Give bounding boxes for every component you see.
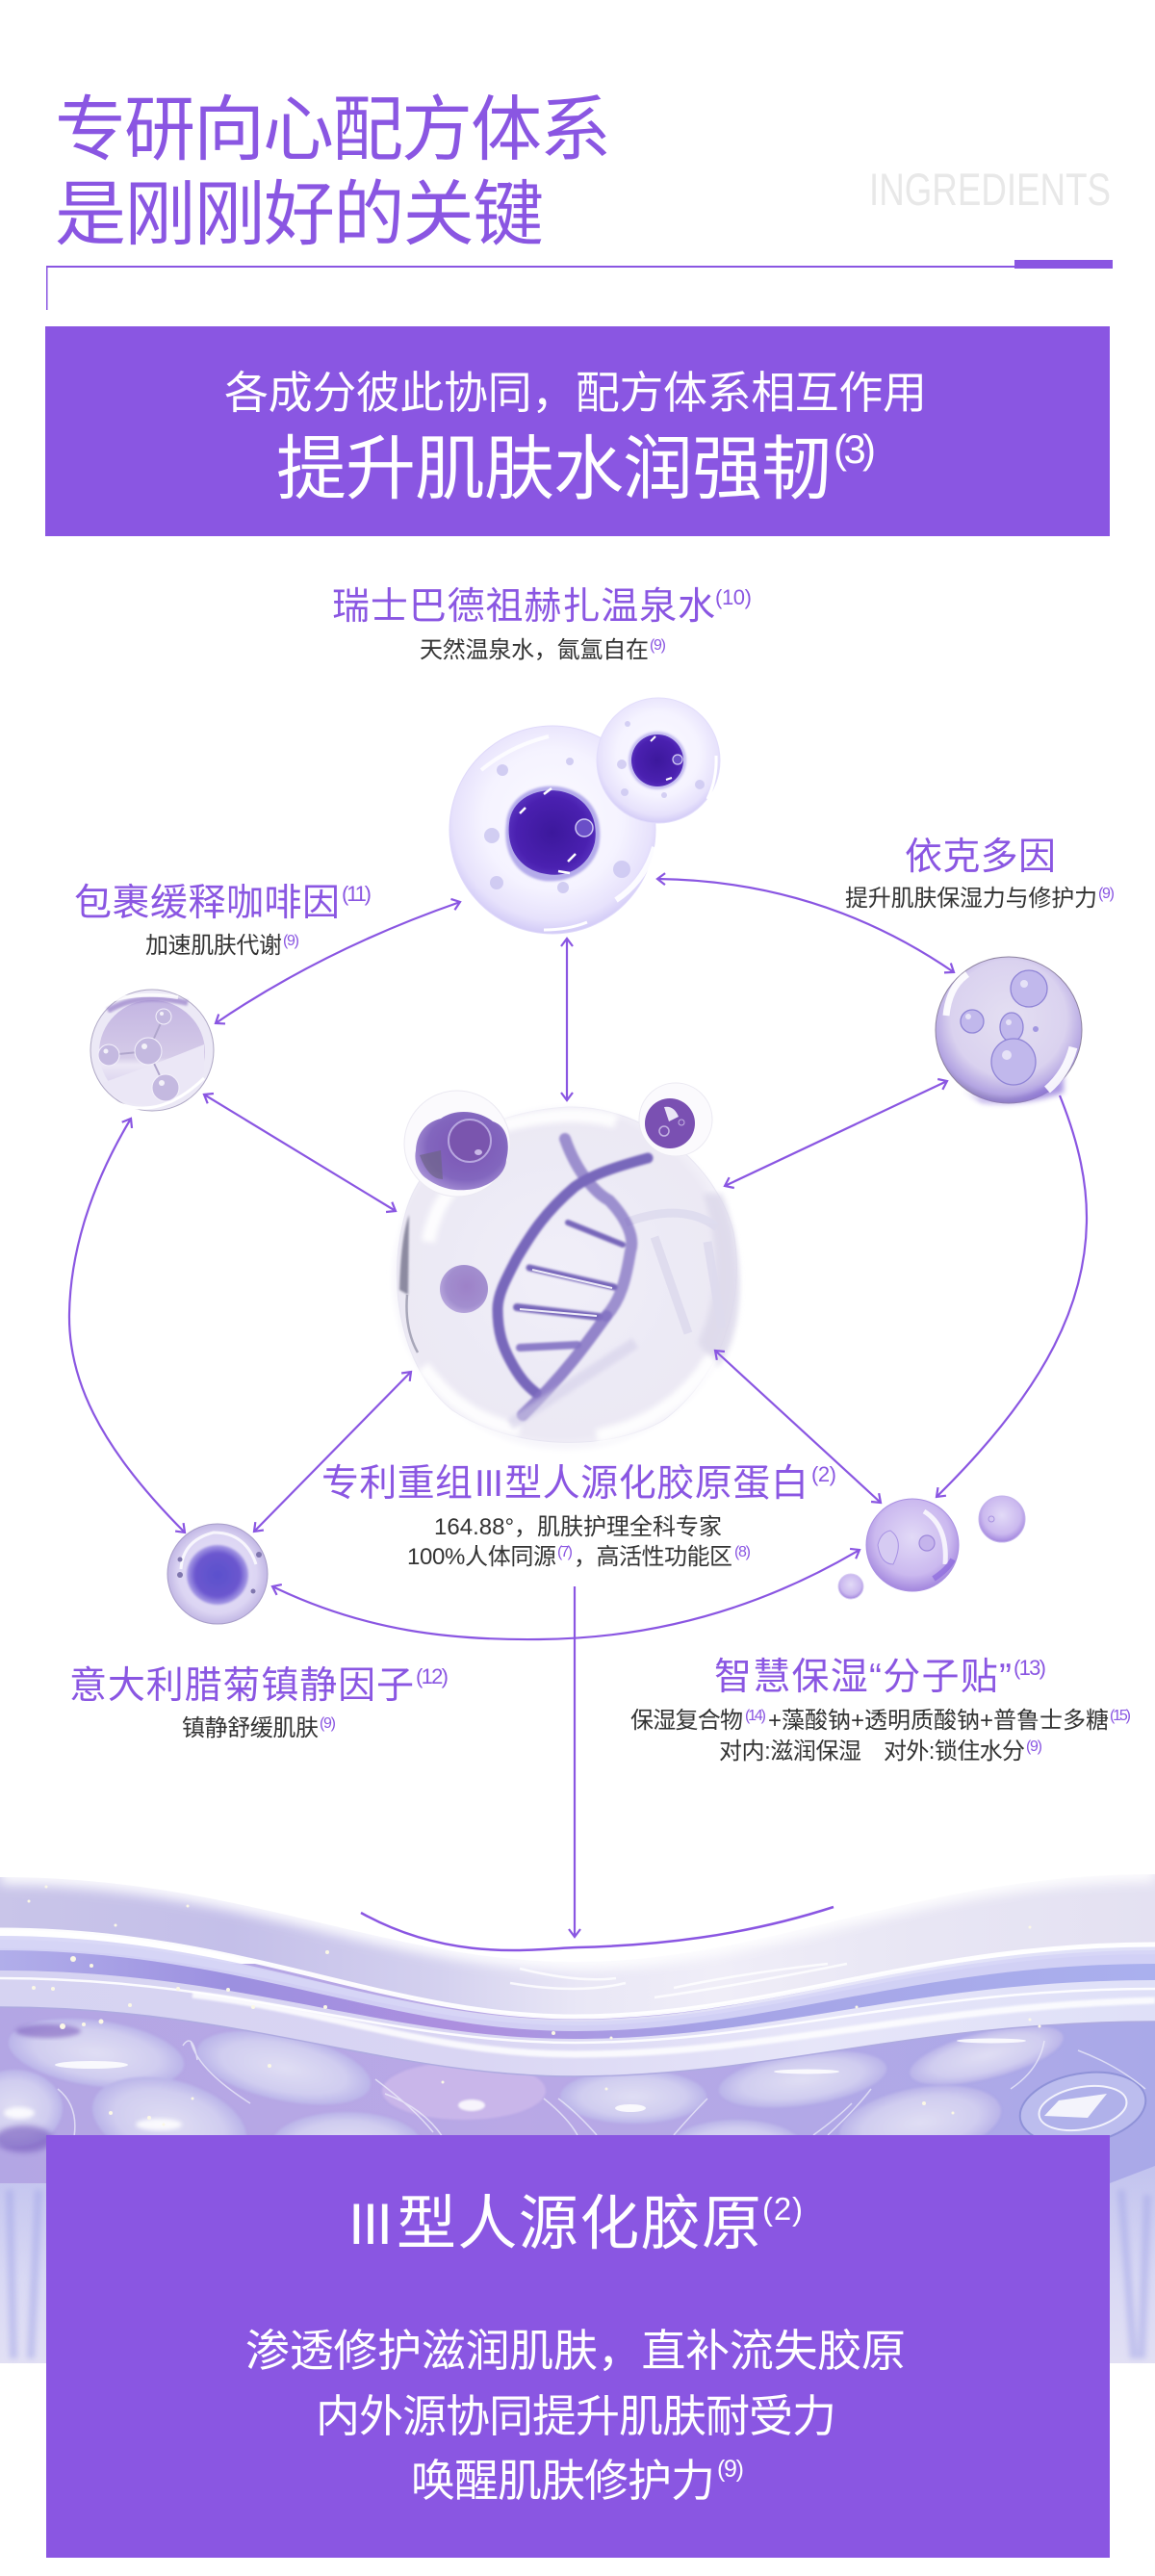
label: helichrysum <box>69 1664 449 1741</box>
bottom banner body <box>245 2326 906 2506</box>
panel: top banner <box>45 326 1110 536</box>
label: recombinant type III collagen: (7) <box>557 1544 573 1560</box>
icon: moisture molecule bubbles <box>838 1496 1025 1599</box>
bottom banner heading: III <box>348 2192 393 2256</box>
illustration: skin layers <box>0 1872 1155 2363</box>
label: recombinant type III collagen: 100%人体同源 <box>407 1544 556 1570</box>
label: spring water: (9) <box>650 637 666 654</box>
label: ectoine: 提升肌肤保湿力与修护力 <box>845 886 1097 912</box>
banner subtitle: 各成分彼此协同，配方体系相互作用 <box>224 368 927 418</box>
label: caffeine <box>74 882 372 959</box>
title <box>55 90 611 254</box>
label: helichrysum: 意大利腊菊镇静因子 <box>69 1665 414 1707</box>
label: molecular patch: (13) <box>1014 1656 1046 1680</box>
label: caffeine: 加速肌肤代谢 <box>145 933 282 959</box>
pod lattice <box>58 2041 1145 2147</box>
bottom banner body: (9) <box>717 2456 744 2483</box>
label: recombinant type III collagen: ，高活性功能区 <box>574 1544 732 1570</box>
label: molecular patch: (15) <box>1110 1708 1131 1724</box>
label: recombinant type III collagen: III <box>475 1463 503 1505</box>
label: ectoine: (9) <box>1098 886 1115 902</box>
icon: ectoine droplet <box>936 957 1082 1103</box>
label: ectoine <box>845 837 1115 912</box>
bottom banner body: 渗透修护滋润肌肤，直补流失胶原 <box>245 2326 906 2376</box>
arrows between ingredients <box>69 879 1087 1639</box>
tube layer <box>0 1940 1155 2076</box>
label: recombinant type III collagen: (2) <box>811 1462 836 1486</box>
banner headline: (3) <box>834 426 876 472</box>
banner headline: 提升肌肤水润强韧 <box>276 430 832 508</box>
side streaks below skin <box>0 2156 1155 2363</box>
bottom banner heading: (2) <box>762 2191 803 2227</box>
icon: DNA collagen sphere <box>393 1083 739 1450</box>
bottom banner body: 内外源协同提升肌肤耐受力 <box>316 2391 836 2441</box>
glitter <box>27 1885 1041 2125</box>
label: molecular patch: (14) <box>745 1708 766 1724</box>
title: 专研向心配方体系 <box>55 90 611 169</box>
panel: bottom banner <box>46 2135 1110 2558</box>
label: helichrysum: (9) <box>320 1715 336 1732</box>
label: recombinant type III collagen <box>321 1462 836 1570</box>
title: 是刚刚好的关键 <box>55 174 544 254</box>
bubble pods <box>0 2009 1068 2184</box>
label: recombinant type III collagen: (8) <box>734 1544 751 1560</box>
ring pod <box>1014 2063 1151 2153</box>
label: molecular patch: 保湿复合物 <box>630 1708 743 1734</box>
label: recombinant type III collagen: 164.88°，肌肤护理全科专家 <box>434 1514 722 1540</box>
label: helichrysum: 镇静舒缓肌肤 <box>182 1715 319 1741</box>
curve: skin surface <box>361 1907 834 1950</box>
label: molecular patch: (9) <box>1026 1739 1042 1755</box>
label: spring water <box>332 585 752 663</box>
label: molecular patch: 智慧保湿“分子贴” <box>714 1657 1012 1698</box>
label: spring water: 天然温泉水，氤氲自在 <box>420 637 649 663</box>
icon: spring water cells <box>449 698 720 934</box>
label: spring water: 瑞士巴德祖赫扎温泉水 <box>332 586 715 628</box>
violet band <box>0 1948 1155 2039</box>
label: recombinant type III collagen: 专利重组 <box>321 1463 473 1505</box>
icon: caffeine capsule <box>90 990 214 1111</box>
label: caffeine: (9) <box>283 933 299 949</box>
label: molecular patch: 对外:锁住水分 <box>884 1739 1025 1765</box>
label: molecular patch <box>630 1656 1131 1765</box>
label: recombinant type III collagen: 型人源化胶原蛋白 <box>504 1463 808 1505</box>
label: caffeine: (11) <box>342 882 372 906</box>
bottom banner body: 唤醒肌肤修护力 <box>411 2456 715 2506</box>
label: ectoine: 依克多因 <box>905 837 1056 878</box>
frosted top layer <box>0 1874 1155 2017</box>
label: helichrysum: (12) <box>416 1664 449 1688</box>
label: molecular patch: 对内:滋润保湿 <box>719 1739 861 1765</box>
label: molecular patch: +藻酸钠+透明质酸钠+普鲁士多糖 <box>768 1708 1109 1734</box>
bottom banner heading: 型人源化胶原 <box>397 2191 761 2257</box>
header rule <box>46 260 1113 310</box>
label: spring water: (10) <box>715 585 752 609</box>
pod highlights <box>4 2039 1026 2130</box>
icon: helichrysum cell <box>167 1524 268 1624</box>
label: caffeine: 包裹缓释咖啡因 <box>74 883 340 924</box>
arrow: collagen to skin <box>574 1586 576 1937</box>
